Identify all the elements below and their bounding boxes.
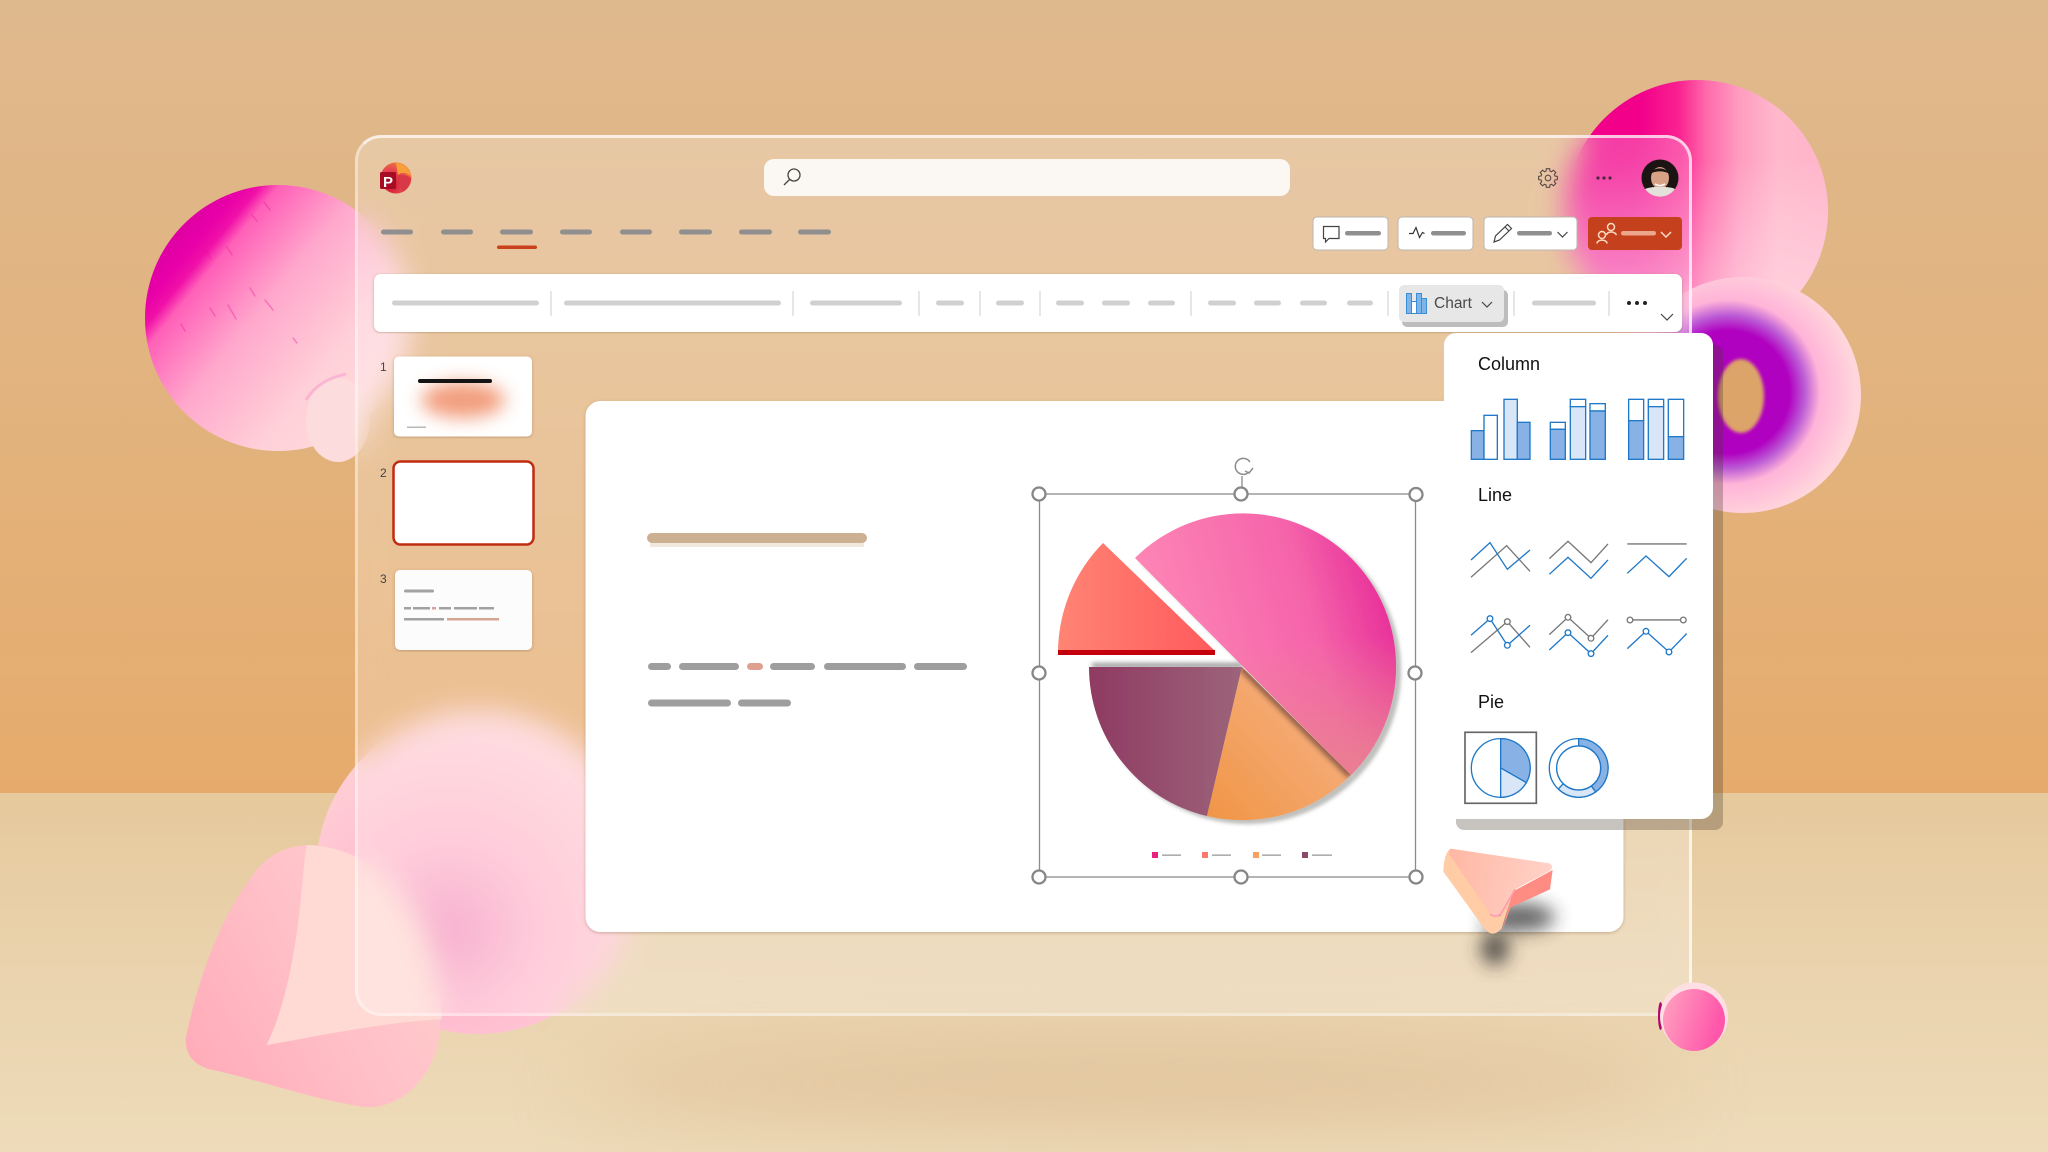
- icon: PowerPoint logo: P: [383, 174, 393, 191]
- resize handles: [1032, 488, 1422, 884]
- ribbon collapse chevron: [1661, 314, 1673, 320]
- slide body placeholder: [648, 663, 967, 706]
- search bar: [764, 159, 1290, 196]
- ribbon toolbar: [374, 274, 1682, 332]
- rotate handle: [1235, 458, 1253, 474]
- application interface: [372, 159, 1728, 1051]
- slice: plum: [1089, 667, 1242, 816]
- slide thumbnail 2 selected: 2: [380, 466, 387, 480]
- slide title placeholder: [647, 533, 867, 547]
- sphere nub: [306, 374, 370, 462]
- cursor top face: [1449, 849, 1552, 916]
- icon: pie selected: [1465, 732, 1536, 803]
- slice: orange: [1207, 667, 1351, 820]
- main slide: [586, 401, 1624, 932]
- icon: percent line: [1627, 544, 1687, 577]
- icon: percent stacked column: [1629, 399, 1684, 459]
- ribbon overflow dots: [1627, 301, 1647, 305]
- icon: 3D cursor arrow: [1443, 849, 1555, 965]
- floor shadow: [570, 1043, 1690, 1127]
- glass app window: [355, 135, 1692, 1016]
- slide thumbnail 1: [380, 356, 532, 436]
- panel: chart type dropdown: [1444, 333, 1713, 819]
- chart button: [1399, 285, 1508, 327]
- icon: search: [784, 169, 800, 185]
- slide thumbnail 3: 3: [380, 572, 387, 586]
- chart type icons: [1465, 399, 1687, 803]
- cursor side right: [1502, 870, 1553, 932]
- icon: stacked column: [1550, 399, 1605, 459]
- icon: doughnut: [1549, 739, 1608, 797]
- sphere streaks: [181, 202, 297, 343]
- icon: settings gear: [1539, 169, 1557, 187]
- chord shadow on orange slice: [1242, 667, 1351, 775]
- ribbon placeholder items: [392, 300, 1596, 306]
- cursor shadow: [1481, 903, 1555, 965]
- button: comments: [1313, 217, 1388, 250]
- wall: [0, 0, 2048, 794]
- user avatar: [1642, 160, 1678, 197]
- blob: right upper sphere: [1560, 80, 1830, 345]
- slide thumbnail 1: 1: [380, 360, 387, 374]
- cursor pink edge: [1490, 889, 1515, 916]
- icon: line chart: [1471, 543, 1530, 577]
- slice: coral exploded: [1058, 543, 1215, 655]
- blob: front petal: [186, 845, 442, 1107]
- blob: left sphere: [145, 185, 411, 462]
- icon: PowerPoint logo: [380, 162, 412, 194]
- icon: clustered column: [1471, 399, 1530, 459]
- active tab underline: [497, 246, 537, 249]
- button: edit: [1484, 217, 1577, 250]
- icon: stacked line with markers: [1549, 614, 1608, 656]
- menu tabs: [381, 230, 831, 249]
- button: share: [1588, 217, 1682, 250]
- slide thumbnail 3: [380, 570, 532, 650]
- icon: percent line with markers: [1627, 617, 1687, 655]
- pie chart: [1058, 513, 1396, 858]
- heading: Column: Column: [1478, 354, 1540, 374]
- icon: stacked line: [1549, 541, 1608, 578]
- heading: Line: Line: [1478, 485, 1512, 505]
- floor: [0, 793, 2048, 1152]
- slide thumbnail 2 selected: [380, 462, 534, 544]
- chart selection frame: [1032, 458, 1422, 884]
- slices base: [1089, 667, 1351, 820]
- decorative pink dot: [1658, 982, 1728, 1051]
- blob: right torus: [1625, 277, 1861, 513]
- cursor side left: [1443, 849, 1513, 934]
- slice: pink: [1135, 513, 1396, 775]
- heading: Pie: Pie: [1478, 692, 1504, 712]
- label: Chart: Chart: [1434, 295, 1473, 312]
- icon: chart bars: [1406, 294, 1426, 314]
- plum shadow: [1092, 663, 1242, 668]
- icon: line with markers: [1471, 616, 1530, 653]
- button: activity: [1398, 217, 1473, 250]
- ribbon separators: [551, 291, 1609, 316]
- chart legend: [1152, 852, 1332, 858]
- dropdown shadow: [1456, 345, 1723, 830]
- icon: more options: [1596, 176, 1612, 180]
- blob: lower back sphere: [316, 710, 640, 1034]
